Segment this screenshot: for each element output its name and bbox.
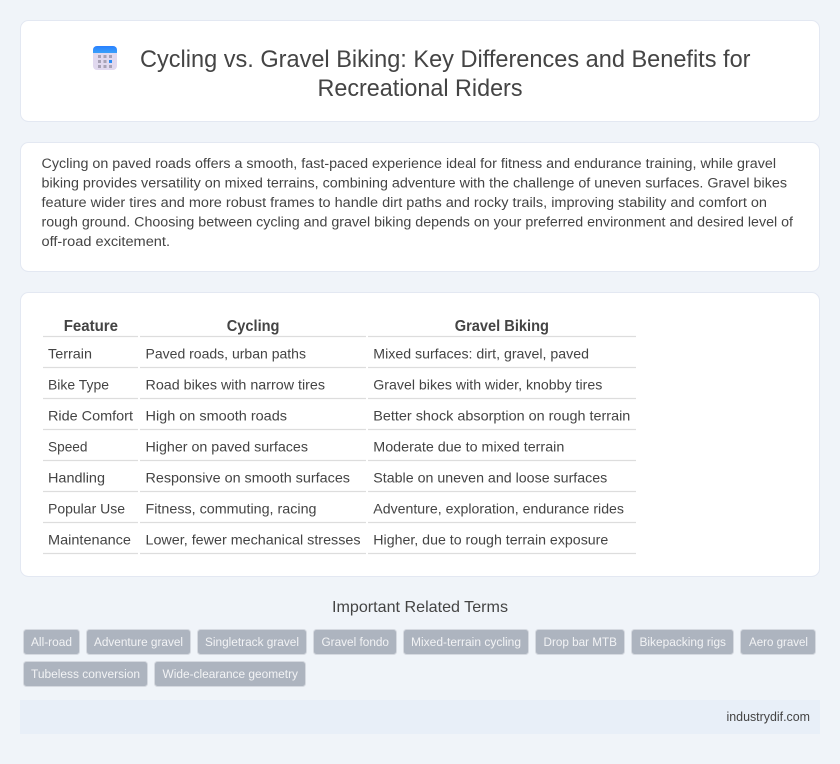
panel: header card xyxy=(20,20,820,122)
row: speed: Moderate due to mixed terrain xyxy=(373,438,564,454)
icon: calendar xyxy=(93,46,117,70)
row: popular use xyxy=(43,500,636,522)
table header: Feature xyxy=(64,318,118,335)
row: popular use: Adventure, exploration, endurance rides xyxy=(373,500,624,516)
row: handling: Handling xyxy=(48,469,105,485)
panel: description card xyxy=(20,142,820,272)
tags: related terms: Drop bar MTB xyxy=(544,635,617,649)
text block: description: feature wider tires and more robust frames to handle dirt paths and rocky trails, improving stability and comfort on xyxy=(42,195,767,211)
text block: description: off-road excitement. xyxy=(42,234,170,250)
footer: industrydif.com xyxy=(726,710,810,724)
row: speed: Higher on paved surfaces xyxy=(146,438,308,454)
row: terrain: Terrain xyxy=(48,345,92,361)
row: bike type: Road bikes with narrow tires xyxy=(146,376,325,392)
row: popular use: Fitness, commuting, racing xyxy=(146,500,316,516)
row: handling: Responsive on smooth surfaces xyxy=(146,469,350,485)
table header: Gravel Biking xyxy=(455,318,549,335)
row: ride comfort: Better shock absorption on rough terrain xyxy=(373,407,630,423)
row: maintenance: Lower, fewer mechanical stresses xyxy=(146,531,360,547)
text block: description: rough ground. Choosing between cycling and gravel biking depends on your preferred environment and desired level of xyxy=(42,214,793,230)
table header xyxy=(43,318,636,336)
row: terrain: Mixed surfaces: dirt, gravel, paved xyxy=(373,345,589,361)
tags: related terms: Wide-clearance geometry xyxy=(162,667,299,681)
tags: related terms: Mixed-terrain cycling xyxy=(411,635,521,649)
row: bike type xyxy=(43,376,636,398)
title: Recreational Riders xyxy=(318,75,522,102)
tags: related terms: Singletrack gravel xyxy=(205,635,299,649)
tags: related terms: Tubeless conversion xyxy=(31,667,140,681)
row: handling: Stable on uneven and loose surfaces xyxy=(373,469,607,485)
row: speed: Speed xyxy=(48,438,88,454)
tags: related terms: Aero gravel xyxy=(749,635,808,649)
row: bike type: Bike Type xyxy=(48,376,109,392)
panel: comparison table card xyxy=(20,292,820,576)
tags: related terms: Gravel fondo xyxy=(322,635,389,649)
tags: related terms xyxy=(24,630,816,686)
text block: description: Cycling on paved roads offers a smooth, fast-paced experience ideal for fitness and endurance training, while gravel xyxy=(42,156,776,172)
row: terrain: Paved roads, urban paths xyxy=(146,345,306,361)
row: bike type: Gravel bikes with wider, knobby tires xyxy=(373,376,602,392)
title xyxy=(140,46,751,102)
row: ride comfort: High on smooth roads xyxy=(146,407,287,423)
title: Cycling vs. Gravel Biking: Key Differences and Benefits for xyxy=(140,46,751,73)
row: ride comfort xyxy=(43,407,636,430)
row: maintenance xyxy=(43,531,636,554)
footer xyxy=(20,700,820,734)
row: handling xyxy=(43,469,636,492)
tags: related terms: Bikepacking rigs xyxy=(640,635,726,649)
table header: Cycling xyxy=(227,318,280,335)
row: terrain xyxy=(43,345,636,368)
tags: related terms: Adventure gravel xyxy=(94,635,183,649)
text block: description xyxy=(42,156,793,250)
row: ride comfort: Ride Comfort xyxy=(48,407,133,423)
text block: description: biking provides versatility on mixed terrains, combining adventure with the challenge of uneven surfaces. Gravel bikes xyxy=(42,176,787,192)
row: speed xyxy=(43,438,636,460)
heading: important related terms: Important Related Terms xyxy=(332,599,508,616)
row: popular use: Popular Use xyxy=(48,500,125,516)
row: maintenance: Higher, due to rough terrain exposure xyxy=(373,531,609,547)
tags: related terms: All-road xyxy=(31,635,72,649)
row: maintenance: Maintenance xyxy=(48,531,131,547)
